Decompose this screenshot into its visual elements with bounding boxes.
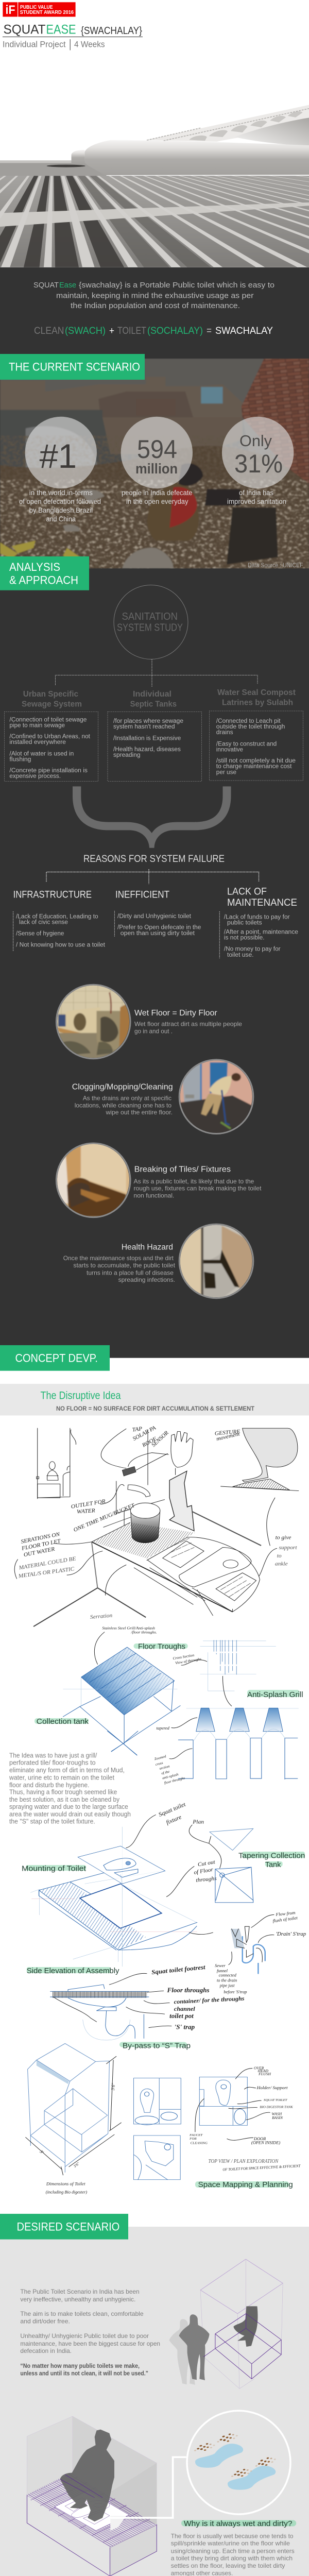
mounting of toilet assembly: fixture [165,1814,183,1826]
text block: the idea: eliminate any form of dirt in terms of Mud, [9,1767,125,1774]
mounting of toilet assembly [30,1801,217,1967]
column: water seal compost latrines: outside the toilet through [216,724,285,730]
award badge: STUDENT AWARD 2016 [20,10,74,15]
band: the disruptive idea: NO FLOOR = NO SURFACE FOR DIRT ACCUMULATION & SETTLEMENT [56,1405,255,1412]
mounting of toilet assembly: of Floor [193,1867,214,1876]
reason: lack of maintenance: public toilets [227,920,262,926]
reason: lack of maintenance: MAINTENANCE [227,897,297,908]
column: individual septic tanks: /Installation is Expensive [113,735,181,741]
handwritten notes: Serration [90,1613,113,1620]
stat captions: and China [46,515,76,523]
text block: the idea: Thus, having a floor trough seemed like [9,1789,117,1796]
sketch: floor troughs and anti-splash grill: View of throughs [175,1656,202,1665]
reason: infrastructure: / Not knowing how to use a toilet [16,942,106,948]
handwritten notes: ROOF [141,1436,158,1449]
text block: desired scenario intro: Unhealthy/ Unhygienic Public toilet due to poor [20,2332,149,2340]
text block: the idea: water, urine etc to remain on the toilet [9,1774,115,1782]
title: EASE [46,22,76,37]
intro paragraph: SQUAT [33,281,59,290]
text block: the idea: floor and disturb the hygiene. [9,1782,89,1789]
handwritten notes: to [277,1553,282,1559]
photo: stained toilet stall [180,1225,252,1297]
column: urban specific sewage system: Urban Specific [23,690,78,699]
breaking tiles text: non functional. [134,1192,174,1199]
reason: inefficient: open than using dirty toilet [121,930,195,937]
floor trough isometric [63,1647,180,1755]
health hazard text: turns into a place full of disease [87,1269,174,1276]
heading: desired scenario: DESIRED SCENARIO [16,2221,119,2233]
side elevation assembly: channel [174,2005,195,2012]
reason: lack of maintenance: is not possible. [224,935,265,941]
S trap bypass sketch: flush of toilet [272,1915,298,1923]
clogging text: wipe out the entire floor. [105,1109,173,1116]
intro paragraph: maintain, keeping in mind the exhaustive usage as per [56,292,254,300]
panel: wet floor [55,984,242,1061]
stat circle: only 31% [222,417,294,488]
panel: health hazard [63,1222,256,1301]
handwritten notes: support [279,1545,298,1551]
text: why wet and dirty: The floor is usually wet because one tends to [171,2532,294,2539]
panel: reasons columns [13,869,298,958]
stat captions: in the open everyday [126,498,188,505]
label: tapering collection tank [238,1851,305,1869]
text block: the idea: the "S" stap of the toilet fixture. [9,1818,95,1825]
text: why wet and dirty [171,2532,295,2576]
project subtitle: Individual Project [3,40,66,49]
text block: desired scenario intro: “No matter how many public toilets we make, [20,2362,140,2369]
label: anti-splash grill: Anti-Splash Grill [247,1690,303,1699]
plan explorations: CLEANING [191,2142,208,2145]
column: individual septic tanks: /Health hazard, diseases [113,747,181,753]
column: water seal compost latrines: /still not completely a hit due [216,758,296,764]
label: space mapping and planning: Space Mapping & Planning [198,2180,293,2189]
text block: the idea: perforated tile/ floor-troughs to [9,1759,96,1767]
photo ring [179,1060,253,1133]
wet floor text [134,1009,242,1035]
breaking tiles text [134,1165,262,1199]
handwritten notes [18,1425,298,1620]
text block: desired scenario intro: and dirt/oder free. [20,2317,70,2325]
wet floor text: Wet floor attract dirt as multiple people [134,1020,242,1027]
reason: infrastructure: INFRASTRUCTURE [13,889,92,901]
side elevation assembly: 'S' trap [175,2024,195,2030]
photo of open defecation site [0,359,309,569]
stat circle: only 31%: Only [239,432,272,450]
sketch: floor troughs and anti-splash grill: Cross Section [173,1653,195,1660]
side elevation assembly: container/ for the throughs [174,1995,245,2005]
intro paragraph: the Indian population and cost of maintenance. [71,301,240,310]
column: urban specific sewage system: Sewage System [22,700,82,708]
stat captions: by Bangladesh,Brazil [29,506,93,514]
reason: infrastructure: /Sense of hygiene [16,931,64,937]
column: individual septic tanks [108,690,202,781]
callout circle: wet dirty footprints [187,2411,290,2514]
title: SQUAT [3,22,45,37]
plan explorations: DOOR [253,2137,266,2141]
handwritten notes: OUTLET FOR [71,1498,106,1510]
text block: desired scenario intro: maintenance, have been the biggest cause for open [20,2340,160,2347]
side elevation assembly: Floor throughs [166,1987,210,1994]
label: floor troughs: Floor Troughs [138,1642,185,1651]
label: why is it always wet and dirty: Why is it always wet and dirty? [184,2519,293,2528]
column: urban specific sewage system: installed everywhere [9,739,66,745]
handwritten notes: TAP [132,1426,143,1433]
plan explorations: SQUAT TOILET [264,2098,288,2102]
health hazard text: Once the maintenance stops and the dirt [63,1255,174,1262]
handwritten notes: SERATIONS ON [20,1531,61,1545]
label: side elevation of assembly: Side Elevation of Assembly [27,1967,119,1975]
handwritten notes: movement [216,1431,241,1442]
label: tapering collection tank: Tapering Collection [238,1851,305,1860]
plan explorations: (OPEN INSIDE) [251,2141,280,2145]
label: mounting of toilet: Mounting of Toilet [22,1864,87,1873]
sanitation system circle: SYSTEM STUDY [117,622,183,634]
S trap bypass sketch: 'Drain' S'trap [276,1931,306,1937]
photo: broken tiles corner [57,1144,130,1216]
reason: lack of maintenance: /No money to pay for [224,946,281,953]
plan explorations: FOR [189,2137,197,2141]
column: urban specific sewage system: /Confined to Urban Areas, not [9,734,91,740]
stat captions: of India has [239,489,273,497]
column: urban specific sewage system: /Alot of water is used in [9,751,74,757]
handwritten notes: OUT WATER [23,1546,56,1558]
photo ring [179,1224,253,1298]
text block: desired scenario intro [20,2288,160,2377]
tapering collection tank plan [189,1825,253,1903]
clogging text [72,1083,173,1116]
column: individual septic tanks: system hasn't reached [113,724,175,730]
column: urban specific sewage system: expensive process. [9,773,61,779]
handwritten notes: GESTURE [214,1429,241,1437]
stat captions: in the world,in-terms [29,489,93,497]
column: water seal compost latrines: /Connected to Leach pit [216,718,281,724]
isometric dimension drawing: 3'6" [110,2083,116,2091]
isometric dimension drawing [26,2043,121,2194]
photo: man mopping toilet [180,1060,252,1132]
handwritten notes: ankle [275,1561,288,1567]
handwritten notes: METAL/S OR PLASTIC [18,1566,75,1579]
award badge [3,2,76,17]
sanitation system circle: SANITATION [122,611,178,622]
equation: clean + toilet = swachalay: SWACHALAY [215,326,273,336]
text block: the idea [9,1752,131,1825]
heading: concept development [0,1345,110,1371]
S trap bypass sketch: to the drain [217,1978,237,1982]
anti-splash zoomed section: floor throughs [164,1776,185,1785]
isometric dimension drawing: (including Bio digester) [46,2190,87,2194]
column: urban specific sewage system: flushing [9,756,31,762]
stat circle: 594 million [121,417,193,488]
plan explorations: FLUSH [258,2072,271,2076]
text: why wet and dirty: using/cleaning up. Each time a person enters [171,2547,295,2554]
column: individual septic tanks: /for places where sewage [113,718,183,724]
equation: clean + toilet = swachalay: (SWACH) [65,326,106,336]
handwritten notes: to give [276,1535,291,1540]
isometric dimension drawing: Dimensions of Toilet [46,2181,85,2186]
plan explorations: BIO DIGESTOR TANK [260,2106,293,2109]
clogging text: Clogging/Mopping/Cleaning [72,1083,173,1092]
photo ring [56,985,130,1059]
project subtitle: 4 Weeks [74,40,105,49]
column: water seal compost latrines: per use [216,770,236,776]
anti-splash zoomed section: anti-splash [162,1772,179,1780]
mounting of toilet assembly: Plan [192,1819,204,1825]
label: tapering collection tank: Tank [265,1860,281,1869]
mounting of toilet assembly: Cut out [197,1859,216,1868]
stat circle: #1 [25,417,97,488]
sketch: zoomed cross section, mounting of toilet and tapering tank [30,1729,306,2040]
column: individual septic tanks: Septic Tanks [130,700,177,708]
column: urban specific sewage system [4,690,98,781]
sanitation system circle [114,585,188,659]
breaking tiles text: Breaking of Tiles/ Fixtures [134,1165,231,1174]
equation: clean + toilet = swachalay: + [109,326,114,336]
heading: analysis and approach [0,556,89,590]
column: individual septic tanks: Individual [133,690,171,699]
S trap bypass sketch: funnel [217,1969,228,1973]
mounting of toilet assembly: throughs [196,1875,217,1884]
text: why wet and dirty: a toilet they bring dirt along with them which [171,2555,293,2562]
isometric toilet with squatting figure [27,2416,186,2576]
S trap bypass sketch: Flow from [275,1910,296,1917]
clogging text: locations, while cleaning one has to [75,1101,171,1109]
text block: the idea: The Idea was to have just a grill/ [9,1752,97,1759]
plan explorations: BASIN [272,2115,283,2120]
reason: lack of maintenance: /Lack of funds to pay for [224,914,290,921]
award badge: PUBLIC VALUE [20,5,53,10]
S trap bypass sketch: before 'S'trap [224,1990,247,1994]
stat captions [19,489,286,523]
reason: lack of maintenance [224,886,298,958]
panel: desired scenario background [0,2227,309,2576]
hero render of floor troughs [0,105,309,267]
label: by-pass to S trap: By-pass to “S” Trap [123,2041,191,2050]
heading: the current scenario: THE CURRENT SCENARIO [9,361,140,374]
health hazard text: starts to accumulate, the public toilet [73,1262,176,1269]
band: the disruptive idea: The Disruptive Idea [40,1390,121,1402]
health hazard text: spreading infections. [118,1276,175,1283]
anti-splash section trapezoids [186,1708,299,1732]
anti-splash zoomed section: cross [155,1761,164,1767]
heading: the current scenario [0,354,145,380]
text: why wet and dirty: settles on the floor, leaving the toilet dirty [171,2562,285,2569]
handwritten notes: MATERIAL COULD BE [18,1556,77,1571]
S trap bypass sketch: connected [219,1973,237,1978]
equation: clean + toilet = swachalay: CLEAN [34,326,64,336]
text block: desired scenario intro: The Public Toilet Scenario in India has been [20,2288,140,2295]
text block: the idea: spraying water and due to the large surface [9,1803,128,1810]
isometric dimension drawing: 3' [38,2149,45,2155]
anti-splash zoomed section: Zoomed [154,1754,167,1761]
photo: dirty squat toilet floor [57,985,130,1058]
curly brace [73,786,231,848]
column: water seal compost latrines: drains [216,730,233,736]
sketch: floor troughs and anti-splash grill [63,1626,299,1755]
text block: desired scenario intro: unless and until its not clean, it will not be used.” [20,2370,148,2377]
stat captions: of open defecation followed [19,498,101,505]
sketch: concept toilet with serrated floor [14,1425,299,1626]
equation: clean + toilet = swachalay: = [207,326,212,336]
plan explorations: OF TOILET FOR SPACE EFFECTIVE & EFFICIENT [222,2163,301,2172]
side elevation assembly [50,1963,245,2040]
reason: lack of maintenance: LACK OF [227,886,267,897]
reason: inefficient: /Prefer to Open defecate in the [117,925,201,931]
reason: inefficient: /Dirty and Unhygienic toilet [117,913,192,920]
data source credit: Data Source : UNICEF [248,563,303,569]
equation: clean + toilet = swachalay: TOILET [117,326,146,336]
clogging text: As the drains are only at specific [83,1094,171,1101]
column: water seal compost latrines: Water Seal Compost [217,688,296,697]
award badge: iF [5,3,15,17]
sketch: dimensions and space mapping [26,2043,301,2194]
project subtitle [3,39,105,50]
intro paragraph: Ease [59,281,76,290]
heading: analysis and approach: & APPROACH [9,574,78,587]
heading: desired scenario [0,2214,128,2240]
reason: inefficient [115,889,201,937]
photo ring [56,1143,130,1217]
column: individual septic tanks: spreading [113,752,140,758]
intro paragraph: {swachalay} is a Portable Public toilet which is easy to [79,281,274,290]
heading: reasons for system failure: REASONS FOR SYSTEM FAILURE [83,854,225,865]
column: urban specific sewage system: /Connection of toilet sewage [9,717,87,723]
wet floor text: Wet Floor = Dirty Floor [134,1009,217,1018]
handwritten notes: SOLAR PA [132,1425,157,1442]
title [3,22,143,37]
stat circle: 594 million: 594 [137,435,177,464]
label: collection tank: Collection tank [37,1717,89,1726]
plan explorations: HEAD [258,2069,269,2073]
S trap bypass sketch: pipe just [219,1984,235,1988]
breaking tiles text: As its a public toilet, its likely that due to the [134,1178,254,1185]
health hazard text: Health Hazard [122,1243,173,1251]
anti-splash zoomed section: section [159,1764,170,1771]
reason: infrastructure: /Lack of Education, Leading to [16,914,98,920]
S trap bypass sketch: Sewer [215,1963,226,1968]
reason: lack of maintenance: /After a point, maintenance [224,929,298,936]
wet floor text: go in and out . [134,1027,173,1035]
panel: top white header and hero render [0,2,309,267]
plan explorations: FAUCET [189,2133,203,2137]
handwritten notes: WATER [77,1507,95,1515]
handwritten notes: SENSOR [150,1430,170,1448]
reason: inefficient: INEFFICIENT [115,889,169,901]
stat circle: only 31%: 31% [234,449,283,478]
reason: infrastructure [13,889,106,948]
reason: infrastructure: lack of civic sense [19,920,68,926]
column: urban specific sewage system: pipe to main sewage [9,722,65,728]
stat circle: 594 million: million [135,461,178,477]
text block: the idea: area the water would drain out easily though [9,1810,131,1818]
handwritten notes: ONE TIME MUG/BUCKET [73,1502,136,1533]
text block: desired scenario intro: The aim is to make toilets clean, comfortable [20,2310,144,2317]
band: the disruptive idea [0,1384,309,1416]
panel: dark section background [0,267,309,1358]
text block: desired scenario intro: very ineffective, unhealthy and unhygienic. [20,2296,135,2303]
S trap bypass sketch [215,1910,306,1994]
column: water seal compost latrines [209,688,303,781]
column: urban specific sewage system: /Concrete pipe installation is [9,768,88,774]
column: water seal compost latrines: to charge maintenance cost [216,764,292,770]
health hazard text [63,1243,176,1283]
handwritten notes: FLOOR TO LET [21,1538,62,1552]
plan explorations [133,2066,301,2180]
panel: current scenario photo [0,359,309,569]
reason: lack of maintenance: toilet use. [227,952,253,958]
sketch: floor troughs and anti-splash grill: Stainless Steel Grill/Anti-splash [102,1626,155,1630]
plan explorations: WASH [271,2112,282,2116]
mounting of toilet assembly: Squat toilet [157,1801,187,1818]
heading: concept development: CONCEPT DEVP. [15,1352,98,1364]
column: water seal compost latrines: /Easy to construct and [216,741,277,747]
plan explorations: OVER [254,2066,264,2070]
diagram: sanitation system study [4,585,303,865]
side elevation assembly: toilet pot [169,2012,194,2020]
text block: desired scenario intro: defecation in India. [20,2347,72,2354]
title: {SWACHALAY} [81,25,142,37]
equation: clean + toilet = swachalay [34,326,273,336]
anti-splash zoomed section: of the [161,1770,170,1775]
sketch: floor troughs and anti-splash grill: /floor throughs. [130,1630,157,1634]
sketch: floor troughs and anti-splash grill: tapered [156,1726,170,1731]
heading: analysis and approach: ANALYSIS [9,561,60,573]
side elevation assembly: Squat toilet footrest [151,1963,206,1976]
breaking tiles text: rough use, fixtures can break making the toilet [134,1185,262,1192]
isometric dimension drawing: 3'6" [72,2161,81,2169]
text block: the idea: the best solution, as it can be cleaned by [9,1796,120,1803]
panel: toilet in use [10,2411,296,2576]
stat captions: people in India defecate [122,489,193,497]
anti-splash plan lines [200,1640,276,1691]
equation: clean + toilet = swachalay: (SOCHALAY) [147,326,203,336]
plan explorations: Holder/ Support [256,2085,288,2090]
stat circle: #1: #1 [39,437,77,475]
column: water seal compost latrines: Latrines by Sulabh [222,699,293,707]
text: why wet and dirty: spill/sprinkle water/urine on the floor while [171,2540,290,2547]
panel: clogging mopping cleaning [72,1059,256,1136]
stat captions: improved sanitation [227,498,286,505]
intro paragraph [33,281,274,310]
panel: breaking of tiles [55,1143,262,1221]
anti-splash zoomed section [108,1729,298,1785]
illustration: people waiting and iso toilet cabin [169,2259,283,2388]
plan explorations: TOP VIEW / PLAN EXPLORATION [209,2158,279,2164]
column: water seal compost latrines: innovative [216,747,243,753]
